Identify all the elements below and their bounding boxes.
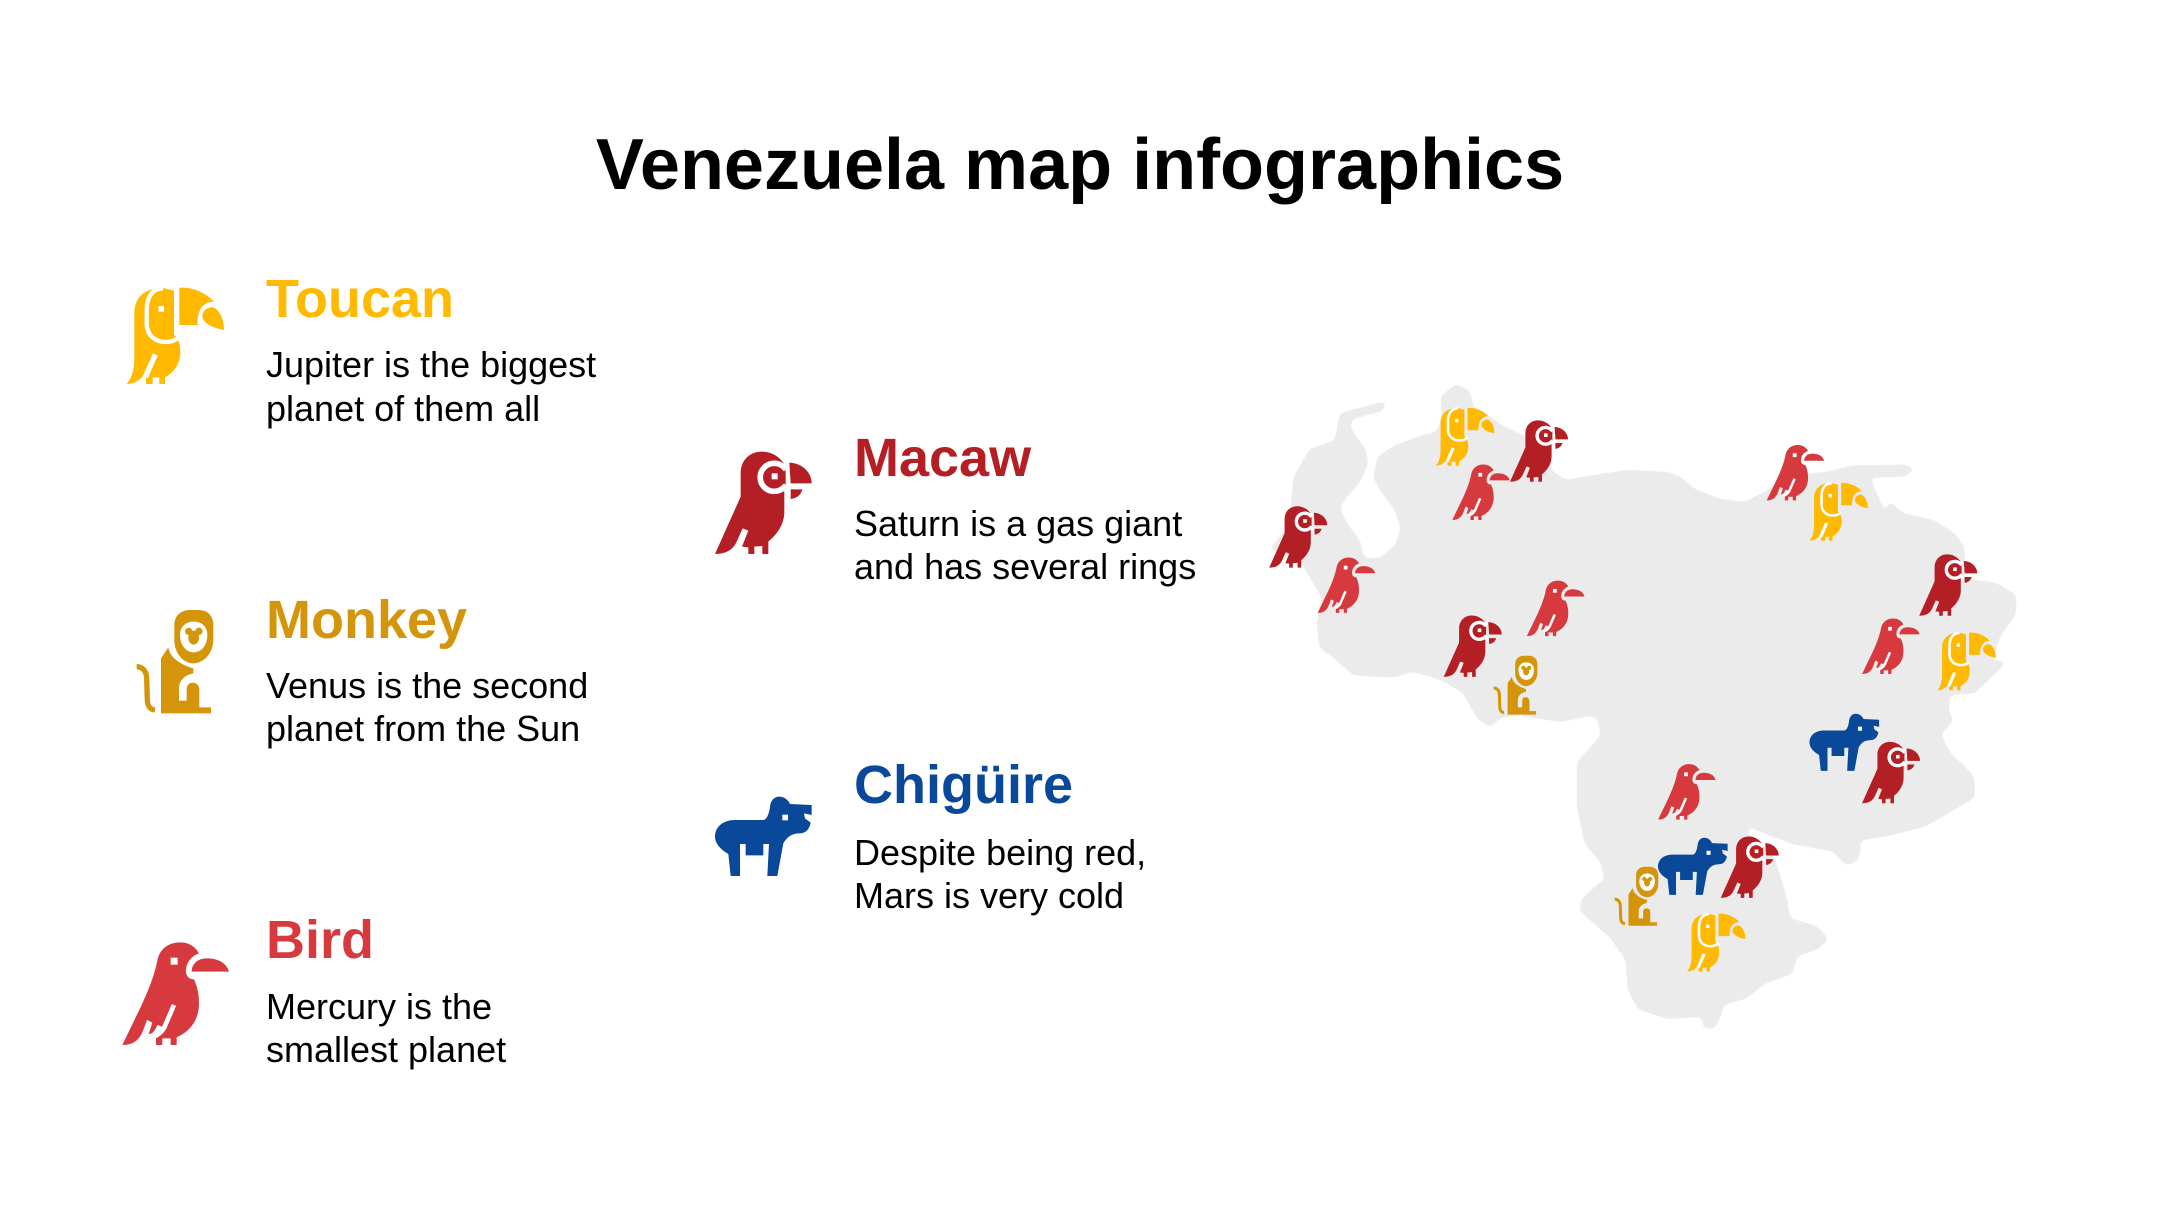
icon: monkey <box>137 610 213 713</box>
text: toucan description: Jupiter is the biggest <box>266 344 596 385</box>
marker: macaws <box>1269 420 1977 898</box>
heading: toucan: Toucan <box>266 269 454 329</box>
icon: toucan <box>127 288 224 384</box>
text: macaw description: and has several rings <box>854 546 1196 587</box>
text: macaw description: Saturn is a gas giant <box>854 503 1182 544</box>
panel: toucan <box>127 269 596 429</box>
text: chiguire description: Despite being red, <box>854 832 1146 873</box>
panel: macaw <box>715 428 1196 587</box>
panel: monkey <box>137 590 588 749</box>
text: bird description: smallest planet <box>266 1029 506 1070</box>
heading: macaw: Macaw <box>854 428 1032 488</box>
map of Venezuela with markers <box>1269 386 2014 1028</box>
country shape <box>1272 386 2014 1028</box>
icon: bird <box>122 942 229 1045</box>
heading: monkey: Monkey <box>266 590 467 650</box>
text: monkey description: planet from the Sun <box>266 708 580 749</box>
marker: toucans <box>1436 408 1996 972</box>
text: bird description: Mercury is the <box>266 986 492 1027</box>
icon: chiguire <box>715 797 812 876</box>
panel: bird <box>122 910 506 1070</box>
panel: chiguire <box>715 755 1146 916</box>
text: toucan description: planet of them all <box>266 388 540 429</box>
icon: macaw <box>715 452 812 554</box>
heading: chiguire: Chigüire <box>854 755 1073 815</box>
text: chiguire description: Mars is very cold <box>854 875 1124 916</box>
marker: birds <box>1318 445 1920 820</box>
text: monkey description: Venus is the second <box>266 665 588 706</box>
marker: monkeys <box>1494 656 1658 926</box>
heading: bird: Bird <box>266 910 374 970</box>
title: Venezuela map infographics <box>596 125 1564 205</box>
marker: chiguires <box>1658 714 1879 895</box>
